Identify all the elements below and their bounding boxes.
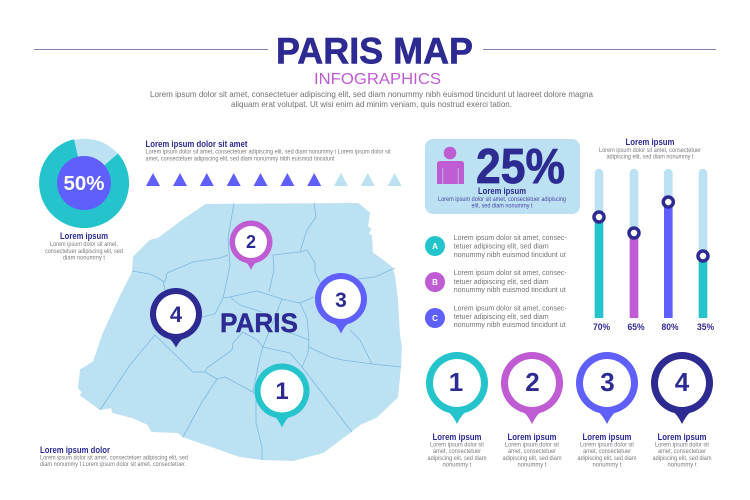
triangle pictogram row (146, 173, 402, 186)
legend 4 caption: nonummy t (668, 462, 697, 468)
legend 2 caption: Lorem ipsum dolor sit (505, 442, 559, 448)
legend 3 caption: nonummy t (592, 462, 622, 468)
top text block: Lorem ipsum dolor sit amet, consectetuer adipiscing elit, sed diam nonummy t Lorem ipsum dolor sit (146, 150, 391, 156)
stat caption: elit, sed diam nonummy t (472, 203, 533, 209)
intro text: aliquam erat volutpat. Ut wisi enim ad minim veniam, quis nostrud exerci tation. (231, 99, 512, 109)
stat value: 25% (476, 140, 565, 194)
subtitle: INFOGRAPHICS (314, 71, 441, 88)
bar 35%: 35% (697, 322, 714, 332)
legend 1 caption: Lorem ipsum dolor sit (430, 442, 484, 448)
bottom left text block (40, 445, 188, 468)
donut caption: Lorem ipsum dolor sit amet, (50, 242, 118, 248)
legend 2 caption: nonummy t (518, 462, 547, 468)
legend pin 3: 3 (600, 367, 615, 397)
legend pin 3 (576, 352, 638, 468)
top text block: Lorem ipsum dolor sit amet (146, 139, 248, 149)
list item B: tetuer adipiscing elit, sed diam (454, 277, 549, 286)
list item B: nonummy nibh euismod tincidunt ut (454, 285, 567, 294)
legend 3 caption (578, 432, 636, 468)
list item C: C (432, 314, 438, 323)
legend 1 caption: Lorem ipsum (432, 432, 482, 442)
legend 3 caption: adipiscing elit, sed diam (578, 456, 636, 462)
top text block: amet, consectetuer adipiscing elit, sed diam nonummy nibh euismod tincidunt (146, 156, 335, 162)
map pin 4: 4 (170, 302, 183, 327)
map district lines (100, 203, 401, 460)
header (34, 30, 716, 109)
legend 1 caption (428, 432, 486, 468)
list item B: Lorem ipsum dolor sit amet, consec- (454, 268, 567, 277)
legend pin 2: 2 (525, 367, 540, 397)
donut caption (45, 231, 123, 262)
list item A: nonummy nibh euismod tincidunt ut (454, 250, 567, 259)
legend 4 caption: Lorem ipsum (658, 432, 706, 442)
map pin 1 (254, 364, 310, 428)
bottom left text block: Lorem ipsum dolor (40, 445, 110, 455)
bottom left text block: Lorem ipsum dolor sit amet, consectetuer adipiscing elit, sed (40, 456, 188, 462)
intro text (150, 89, 593, 109)
list item C: Lorem ipsum dolor sit amet, consec- (454, 304, 567, 312)
donut value: 50% (64, 173, 105, 195)
legend 4 caption: adipiscing elit, sed diam (652, 456, 712, 462)
stat caption (438, 186, 566, 209)
title: PARIS MAP (276, 30, 473, 72)
bar chart heading (599, 137, 701, 160)
legend 1 caption: adipiscing elit, sed diam (428, 456, 486, 462)
icon: person (437, 147, 464, 184)
donut caption: diam nonummy t (63, 256, 105, 262)
list item C: tetuer adipiscing elit, sed diam (454, 312, 549, 321)
list item A: tetuer adipiscing elit, sed diam (454, 242, 549, 250)
legend 3 caption: Lorem ipsum (582, 432, 632, 442)
map pin 2 (230, 220, 272, 270)
bar chart (593, 169, 714, 332)
top text block (146, 139, 391, 162)
legend 2 caption: amet, consectetuer (508, 449, 556, 455)
donut caption: Lorem ipsum (60, 231, 108, 241)
bar 65%: 65% (628, 322, 644, 332)
legend 1 caption: nonummy t (442, 462, 472, 468)
map pin 3 (315, 273, 367, 334)
list item B: B (432, 278, 438, 287)
bar 70%: 70% (593, 322, 610, 332)
map label: PARIS (220, 308, 298, 338)
list item A: A (432, 242, 438, 251)
legend 4 caption: Lorem ipsum dolor sit (655, 442, 709, 448)
legend pin 4 (651, 352, 713, 468)
list item B (425, 268, 567, 294)
map pin 1: 1 (275, 378, 289, 405)
legend 2 caption: adipiscing elit, sed diam (502, 456, 562, 462)
bar chart heading: Lorem ipsum dolor sit amet, consectetuer (599, 148, 701, 154)
panel: 25% stat (425, 139, 580, 214)
legend 1 caption: amet, consectetuer (433, 449, 481, 455)
donut chart: 50% (39, 139, 129, 228)
bar chart heading: Lorem ipsum (626, 137, 674, 147)
map of Paris (79, 203, 401, 460)
list item A (425, 233, 567, 259)
legend pin 1: 1 (449, 367, 463, 397)
legend pin 1 (426, 352, 488, 468)
bar 35% (697, 169, 714, 332)
list item C (425, 304, 567, 329)
stat caption: Lorem ipsum (478, 186, 526, 196)
map pin 4 (150, 288, 202, 348)
bar 80%: 80% (662, 322, 678, 332)
bar 80% (662, 169, 678, 332)
legend 4 caption (652, 432, 712, 468)
legend 3 caption: amet, consectetuer (583, 449, 631, 455)
bar 65% (628, 169, 644, 332)
legend 2 caption: Lorem ipsum (508, 432, 556, 442)
list item C: nonummy nibh euismod tincidunt ut (454, 320, 567, 329)
legend 2 caption (502, 432, 562, 468)
stat caption: Lorem ipsum dolor sit amet, consectetuer adipiscing (438, 197, 566, 203)
list item A: Lorem ipsum dolor sit amet, consec- (454, 233, 567, 242)
legend pin 2 (501, 352, 563, 468)
bar chart heading: adipiscing elit, sed diam nonummy t (606, 154, 694, 160)
map pin 2: 2 (246, 232, 256, 252)
bar 70% (593, 169, 610, 332)
bottom left text block: diam nonummy t Lorem ipsum dolor sit amet, consectetuer. (40, 462, 186, 468)
legend 4 caption: amet, consectetuer (658, 449, 706, 455)
map pin 3: 3 (335, 289, 347, 312)
donut caption: consectetuer adipiscing elit, sed (45, 249, 123, 255)
legend pin 4: 4 (675, 367, 690, 397)
intro text: Lorem ipsum dolor sit amet, consectetuer adipiscing elit, sed diam nonummy nibh euismod tincidunt ut laoreet dolore magna (150, 89, 593, 99)
legend 3 caption: Lorem ipsum dolor sit (580, 442, 634, 448)
